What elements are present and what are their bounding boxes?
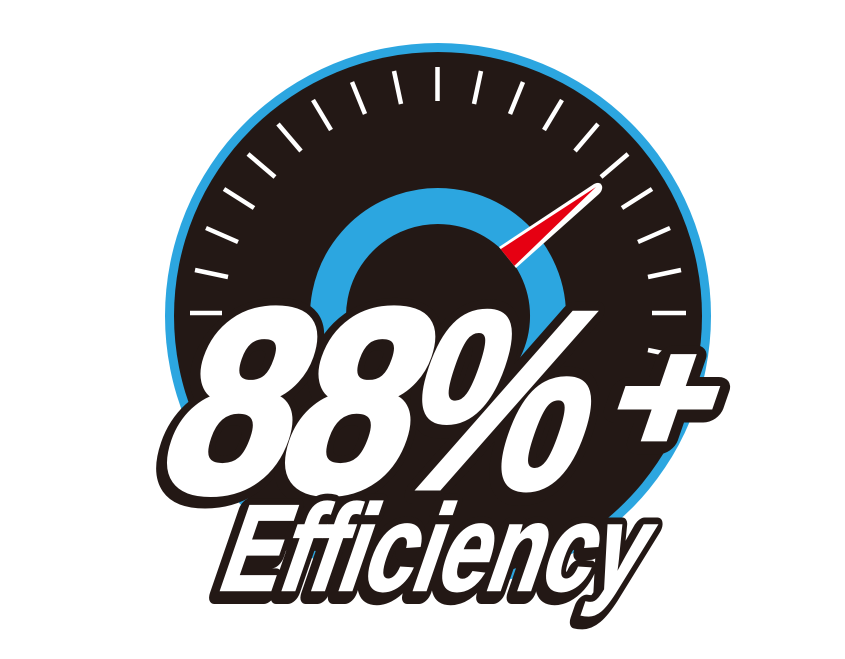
headline outline: 8: [130, 259, 353, 547]
blue outer ring: [165, 43, 711, 589]
needle white outline: [499, 183, 602, 268]
headline white: [132, 257, 752, 545]
label white: Efficiency: [206, 479, 673, 616]
tick marks: [190, 67, 686, 354]
headline outline: [130, 259, 750, 547]
headline outline: +: [585, 308, 750, 487]
needle red body: [501, 187, 596, 266]
headline white: 8: [250, 257, 473, 545]
blue inner arc: [328, 206, 548, 371]
headline white: 8: [132, 257, 355, 545]
dark dial face: [174, 52, 702, 580]
needle: [499, 183, 602, 268]
gauge dial: [165, 43, 711, 589]
headline 88%+: [130, 257, 752, 547]
headline outline: %: [363, 260, 647, 544]
label outline: Efficiency: [203, 482, 670, 619]
label Efficiency: [203, 479, 673, 619]
headline outline: 8: [248, 259, 471, 547]
headline white: %: [365, 258, 649, 542]
headline white: +: [587, 306, 752, 485]
